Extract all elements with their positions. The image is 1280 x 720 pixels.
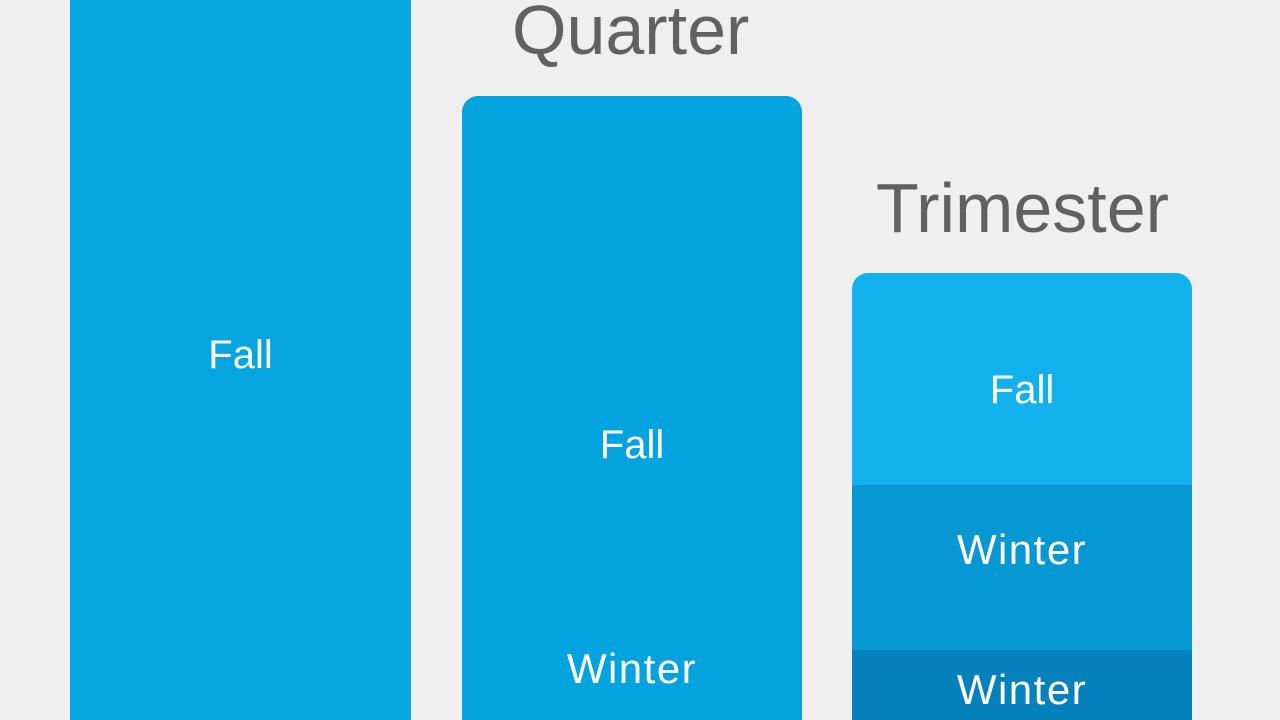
segment: Winter xyxy=(852,485,1192,650)
label: Fall: Fall xyxy=(208,333,273,377)
segment: Winter: Winter xyxy=(957,526,1087,573)
label: Winter: Winter xyxy=(567,645,697,692)
label: Fall: Fall xyxy=(600,423,664,467)
segment: Fall xyxy=(852,273,1192,485)
bar: quarter xyxy=(462,96,802,720)
segment: Fall: Fall xyxy=(990,368,1054,412)
bar: semester (left) xyxy=(70,0,411,720)
bar: trimester xyxy=(852,273,1192,720)
heading: Trimester: Trimester xyxy=(876,169,1169,247)
segment: Winter (dark): Winter xyxy=(957,666,1087,713)
segment: Winter (dark) xyxy=(852,650,1192,720)
